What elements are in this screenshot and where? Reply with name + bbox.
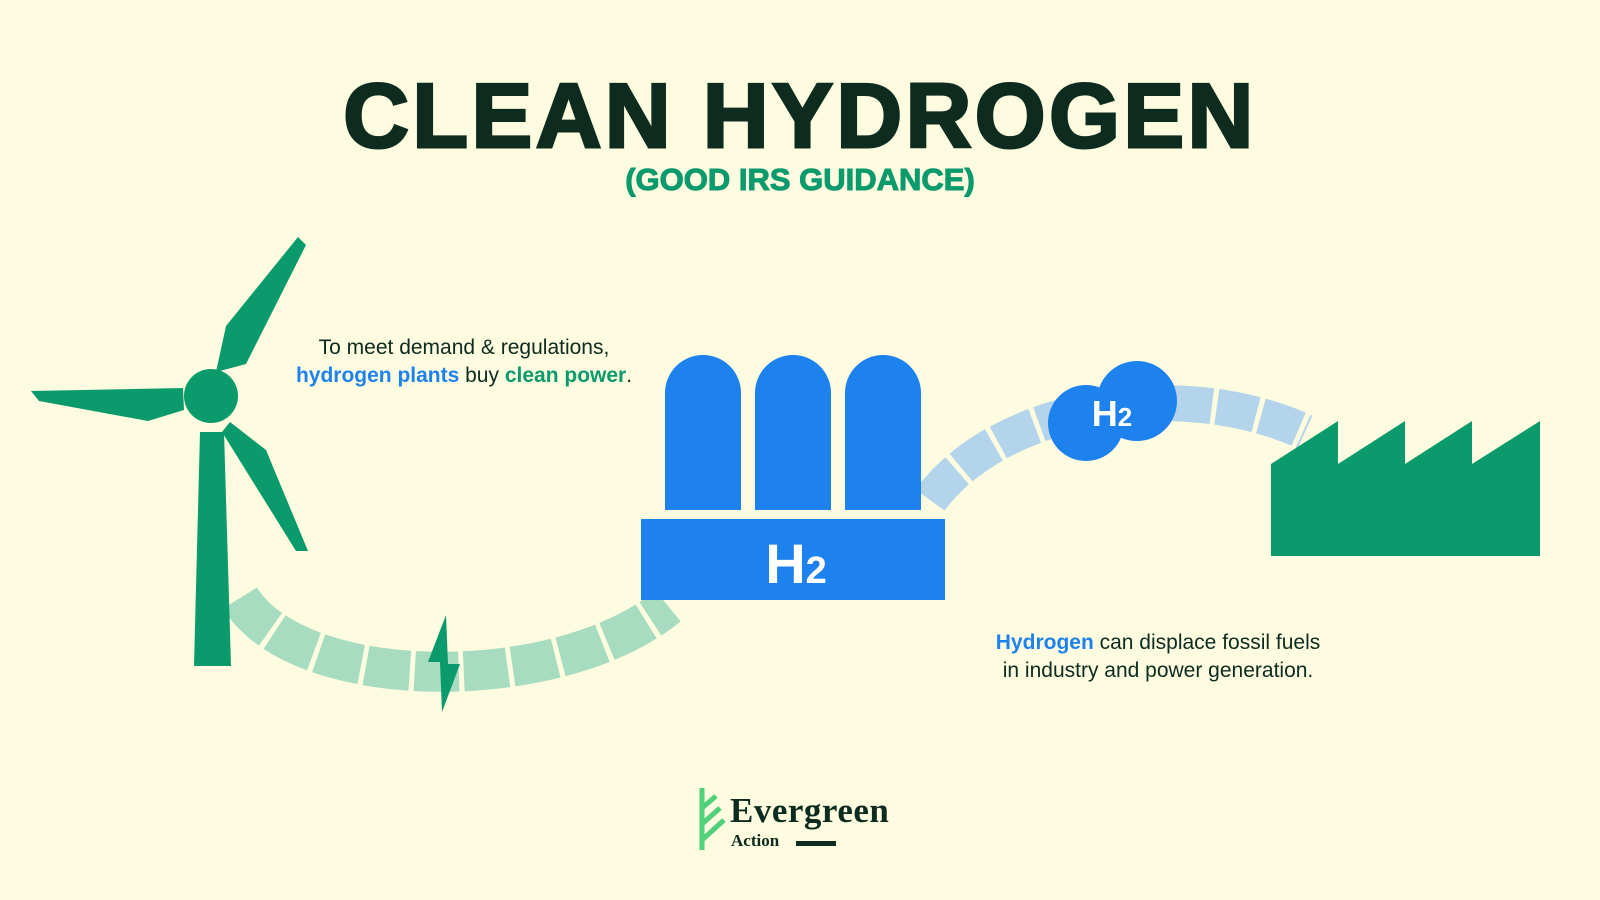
arrow: blue hydrogen arc: [930, 403, 1305, 500]
logo: [700, 788, 889, 850]
logo: Evergreen: [730, 791, 889, 830]
icon: factory: [1271, 421, 1540, 556]
icon: H2 bubbles: [1048, 361, 1177, 461]
arrow: green power arc: [240, 598, 668, 672]
text: clean power: hydrogen plants buy clean power.: [296, 364, 632, 387]
icon: H2 bubbles: H2: [1092, 393, 1132, 434]
title: CLEAN HYDROGEN: [343, 66, 1257, 167]
subtitle: (GOOD IRS GUIDANCE): [625, 162, 975, 197]
text: clean power: To meet demand & regulations,: [319, 336, 609, 359]
icon: lightning bolt: [428, 615, 460, 712]
icon: wind turbine: [31, 237, 308, 666]
logo: Action: [731, 831, 779, 850]
text: displace fossil fuels: [996, 631, 1320, 682]
text: clean power: [296, 336, 632, 387]
text: displace fossil fuels: in industry and power generation.: [1003, 659, 1313, 682]
icon: hydrogen plant: [641, 355, 945, 600]
text: displace fossil fuels: Hydrogen can displace fossil fuels: [996, 631, 1320, 654]
icon: hydrogen plant: H2: [765, 532, 827, 595]
